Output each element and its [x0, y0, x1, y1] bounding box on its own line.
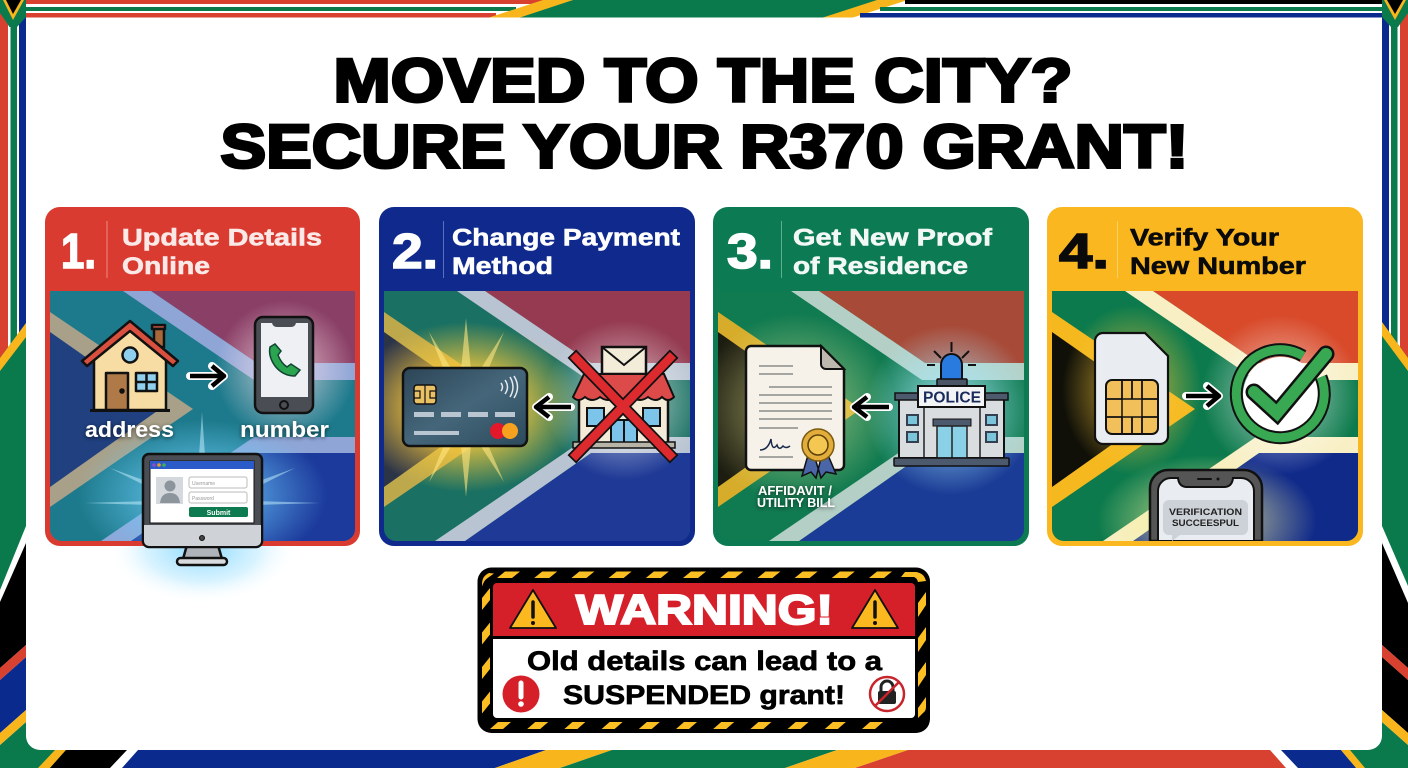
warning message: Old details can lead to a [527, 646, 883, 676]
icon: phone [255, 317, 313, 413]
arrow: shop to card [536, 397, 571, 417]
callout: warning sign [478, 568, 930, 733]
step 2 card frame and header: 2. [392, 225, 438, 279]
title: MOVED TO THE CITY? [334, 46, 1072, 114]
panel: step 4 verify your new number [1047, 207, 1363, 546]
right border stripes [1382, 0, 1408, 768]
warning message: SUSPENDED grant! [563, 680, 845, 710]
step 3 flag background [696, 291, 1035, 541]
step 2 card frame and header: Change Payment [452, 224, 680, 252]
panel: step 2 change payment method [379, 207, 695, 546]
top-right corner Y emblem [1382, 0, 1408, 27]
step 3 card frame and header: of Residence [793, 253, 968, 280]
icon: phone with verification message [1150, 470, 1262, 541]
step 1 flag background [50, 291, 355, 541]
icon: police station [894, 342, 1009, 466]
step 1 card frame and header: Online [122, 253, 210, 280]
arrow: house to phone [190, 366, 224, 386]
title [220, 46, 1188, 180]
warning white body [493, 639, 915, 718]
label: address: address [85, 417, 174, 442]
top border stripes [26, 0, 1382, 18]
label: affidavit / utility bill: UTILITY BILL [757, 496, 835, 510]
step 4 card frame and header [1047, 207, 1363, 546]
icon: phone with verification message: SUCCEESPUL [1172, 518, 1240, 528]
icon: phone with verification message: VERIFICATION [1169, 507, 1242, 517]
step 4 card frame and header: New Number [1130, 253, 1306, 280]
icon: document with seal [746, 346, 844, 478]
step 2 card frame and header [379, 207, 695, 546]
step 4 flag background [1052, 291, 1358, 541]
icon: computer monitor with form: Password [192, 496, 214, 502]
step 1 card frame and header [45, 207, 360, 546]
hazard-striped frame [478, 568, 930, 733]
title: SECURE YOUR R370 GRANT! [220, 112, 1188, 180]
step 4 card frame and header: Verify Your [1130, 224, 1279, 252]
icon: green check in circle [1236, 350, 1326, 438]
panel: step 1 update details online [45, 207, 360, 604]
icon: warning triangle right [852, 590, 898, 628]
step 1 card frame and header: 1. [61, 225, 96, 279]
icon: computer monitor with form [143, 454, 262, 565]
step 4 card frame and header: 4. [1059, 225, 1109, 279]
arrow: SIM to check [1186, 386, 1219, 406]
icon: computer monitor with form: Username [192, 481, 215, 487]
label: affidavit / utility bill [757, 484, 835, 510]
warning message [527, 646, 883, 710]
icon: red exclamation circle [502, 676, 540, 712]
warning red banner [493, 583, 915, 639]
left border stripes [0, 0, 26, 768]
icon: bank card [403, 368, 527, 446]
step 1 card frame and header: Update Details [122, 224, 322, 252]
icon: crossed-out post office shop [573, 347, 675, 455]
panel: step 3 get new proof of residence [696, 207, 1035, 546]
icon: police station: POLICE [923, 390, 981, 406]
step 2 card frame and header: Method [452, 253, 553, 280]
icon: computer monitor with form: Submit [207, 510, 231, 517]
icon: SIM card [1095, 333, 1168, 444]
step 3 card frame and header: 3. [727, 225, 773, 279]
step 3 card frame and header: Get New Proof [793, 224, 993, 252]
icon: prohibited padlock [870, 677, 904, 711]
warning heading: WARNING! [576, 586, 833, 633]
top-left corner Y emblem [0, 0, 26, 27]
step 2 flag background [384, 291, 690, 541]
arrow: police station to document [854, 397, 889, 417]
monitor glow [107, 492, 297, 604]
label: affidavit / utility bill: AFFIDAVIT / [758, 484, 833, 498]
label: number: number [240, 417, 329, 442]
icon: warning triangle left [510, 590, 556, 628]
bottom border stripes [26, 730, 1382, 768]
step 3 card frame and header [713, 207, 1029, 546]
icon: house [82, 321, 178, 410]
